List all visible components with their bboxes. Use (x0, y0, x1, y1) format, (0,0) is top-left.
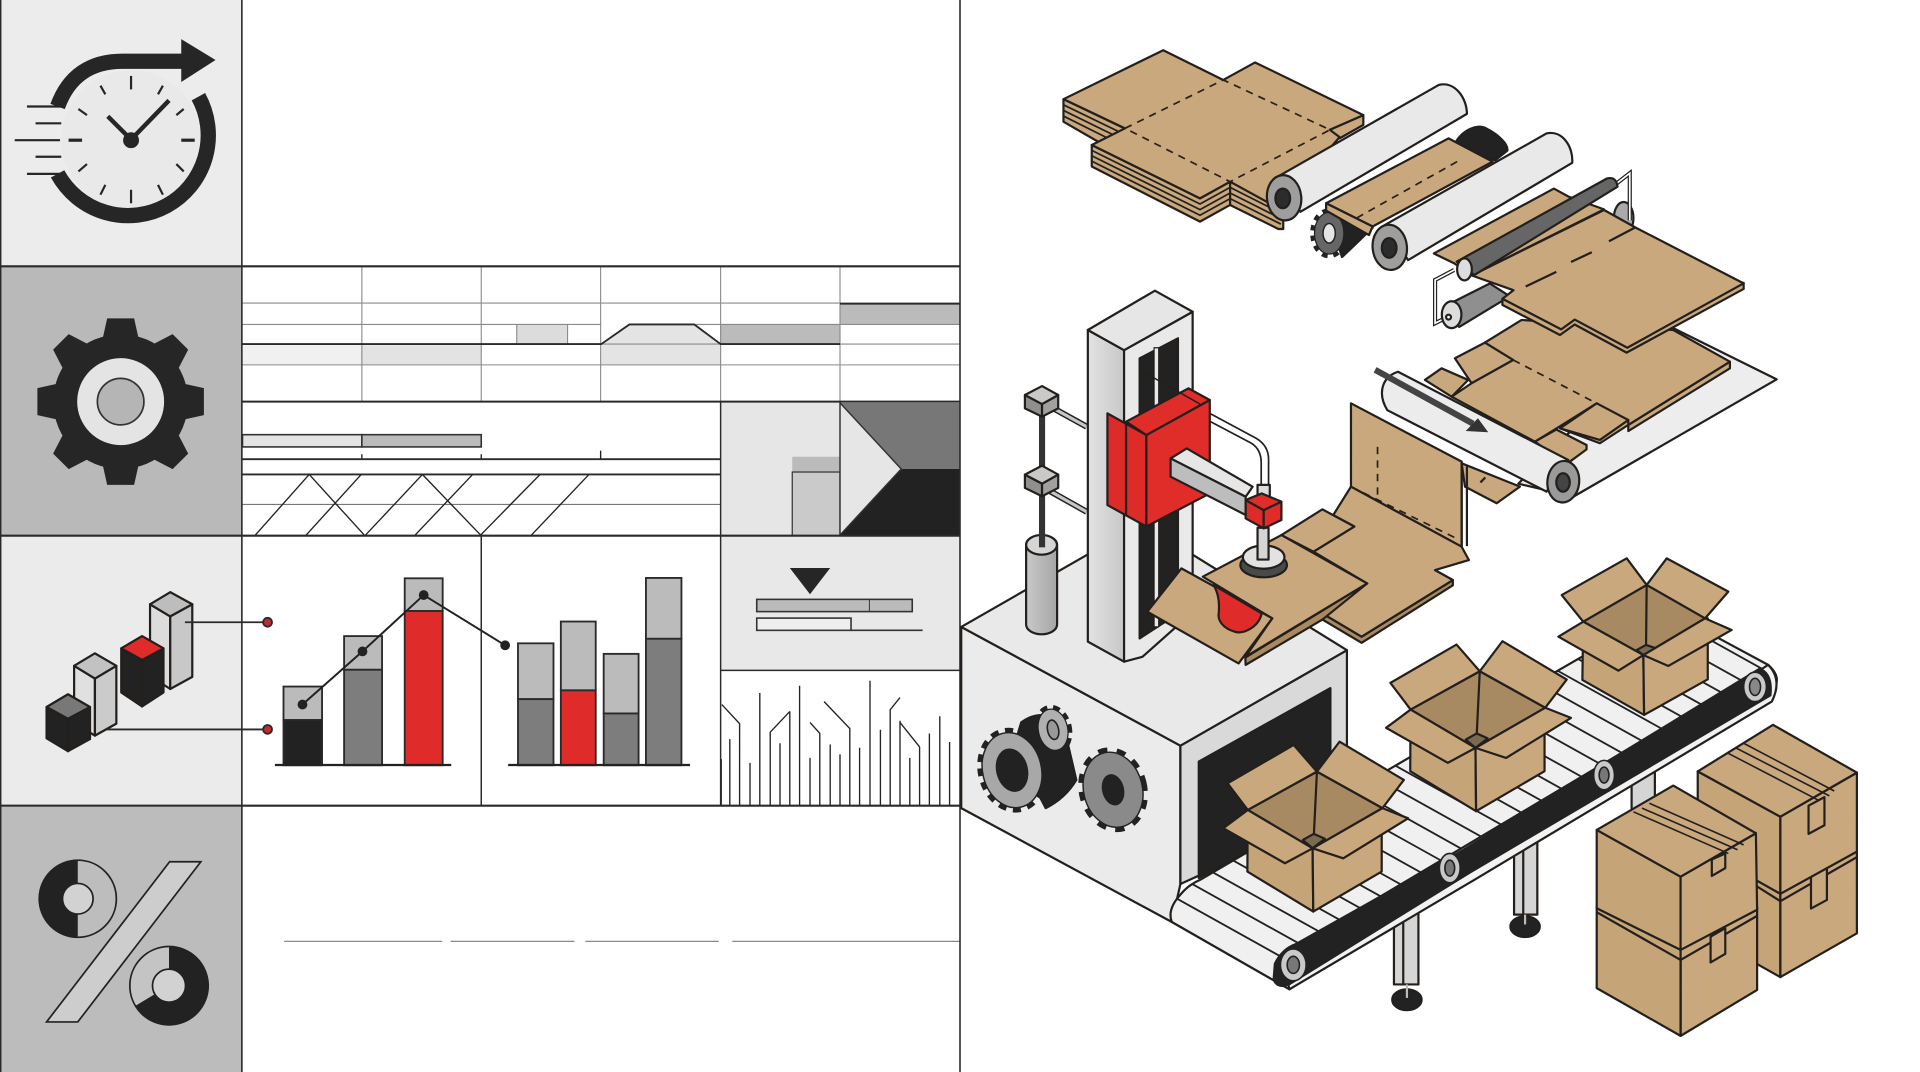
grid frame (0, 0, 960, 1072)
icon: small gear (1314, 212, 1344, 254)
kraft folding blank (1147, 403, 1469, 665)
truss diagonals (255, 474, 589, 535)
kraft strip after roller (1434, 189, 1604, 275)
red adhesive drop (1213, 585, 1262, 632)
chart: spike lines (721, 681, 950, 806)
table cell fills (242, 304, 960, 365)
trend line (298, 590, 510, 709)
icon: percent sign (39, 860, 208, 1025)
base top face (961, 555, 1347, 746)
gauge bars (757, 599, 923, 630)
pneumatic tubes (1210, 413, 1269, 485)
panel: arrow graphic (721, 402, 960, 536)
small lower tab (1535, 430, 1587, 464)
belt pulleys (1280, 672, 1766, 981)
white feed sheet (1518, 328, 1777, 497)
horizontal rods (1048, 405, 1087, 512)
front flap (1147, 568, 1272, 663)
bar chart: left (275, 578, 510, 765)
nozzle head (1246, 485, 1281, 528)
direction arrow (1375, 370, 1488, 432)
dark roller behind (1455, 127, 1507, 160)
progress bar (242, 435, 481, 447)
belt slats (1178, 641, 1762, 956)
leg one (1392, 910, 1422, 1010)
upper kraft sheet (1472, 210, 1744, 353)
front upper box (1597, 786, 1757, 950)
conveyor legs (1392, 765, 1655, 1010)
panel: gear icon (0, 267, 242, 536)
main panel (1245, 583, 1367, 665)
pneumatic cylinder (1026, 533, 1057, 634)
panel: timeline strip (242, 435, 721, 535)
leg two (1510, 841, 1540, 937)
white roller one (1265, 84, 1467, 222)
left stack layers (1063, 99, 1133, 162)
vertical rod (1039, 410, 1045, 545)
panel: speed clock icon (0, 0, 242, 266)
main sheet face (1452, 320, 1730, 442)
column slot (1140, 338, 1178, 638)
panel: percent icon (0, 807, 242, 1072)
base left face (961, 627, 1180, 922)
dashed baseline (284, 940, 960, 942)
panel: gantry table (242, 267, 960, 402)
sheet thickness (1502, 283, 1744, 353)
front stack layers (1092, 145, 1283, 229)
belt surface (1170, 606, 1777, 989)
icon: right arrow (840, 403, 901, 535)
upper flap (1455, 343, 1513, 383)
bracket frame (1435, 173, 1630, 323)
icon: front dark block (47, 694, 90, 751)
suction pad (1240, 528, 1287, 577)
blank top face (1063, 50, 1363, 208)
panel: marker and bars (721, 536, 960, 670)
left guide rods and cylinder (1025, 386, 1087, 634)
connector callouts (107, 618, 272, 734)
kraft strip between rollers (1326, 138, 1493, 235)
icon: right gear (1075, 746, 1151, 834)
open box on belt, third (1558, 558, 1732, 715)
icon: red topped block (121, 636, 163, 707)
side flap (1281, 509, 1354, 552)
icon: clock with arrow (15, 39, 216, 216)
column front face (1124, 312, 1193, 662)
open box on belt, first (1223, 742, 1408, 912)
black side band (1273, 669, 1771, 986)
column top face (1088, 291, 1193, 350)
belt outer sliver (1282, 665, 1777, 989)
rear roller disc (1614, 202, 1633, 234)
white roller three (1382, 372, 1581, 504)
guide cube lower (1025, 466, 1058, 496)
back panel (1351, 403, 1462, 547)
machine base (961, 555, 1347, 922)
leg three (1632, 765, 1655, 814)
fold lines (1351, 447, 1457, 539)
column left face (1088, 330, 1124, 662)
second tab (1425, 368, 1468, 397)
floor panel (1322, 580, 1453, 643)
rear upper box (1698, 725, 1857, 894)
front tab (1560, 420, 1628, 443)
dark grey rod (1457, 178, 1618, 280)
icon: medium grey block (74, 653, 116, 736)
front closed box stack (1597, 786, 1757, 1036)
red carriage (1107, 370, 1210, 527)
rear lower box (1698, 845, 1857, 977)
kraft flap under roller (1462, 463, 1520, 503)
machine opening (1199, 688, 1330, 878)
rear right layers (1330, 115, 1363, 138)
sheet thickness (1628, 362, 1730, 431)
gear cluster on base (974, 706, 1151, 834)
drum behind gears (1014, 715, 1076, 808)
icon: lower donut (130, 946, 208, 1025)
icon: down triangle (790, 568, 830, 594)
open box on belt, second (1386, 641, 1571, 811)
white roller two (1370, 133, 1572, 272)
guide cube upper (1025, 386, 1058, 417)
icon: gear (37, 318, 204, 485)
rear closed box stack (1698, 725, 1857, 977)
small gear drum (1314, 207, 1373, 257)
icon: large gear (974, 726, 1050, 814)
sheet top face (1472, 210, 1744, 348)
icon: upper donut (39, 860, 116, 937)
base right face (1180, 650, 1347, 884)
flat blank stack (1063, 50, 1363, 229)
icon: small gear (1034, 706, 1072, 753)
scene: packaging machine line (961, 50, 1857, 1036)
bar chart: right (508, 578, 690, 765)
icon: percent slash (47, 862, 201, 1022)
lower kraft sheet (1425, 320, 1730, 464)
icon: tall grey block (150, 592, 192, 689)
conveyor belt (1169, 638, 1778, 990)
panel: isometric blocks icon (0, 536, 272, 806)
vertical column (1088, 291, 1193, 662)
robot arm (1171, 448, 1253, 515)
front lower box (1597, 907, 1757, 1036)
lower small roller (1442, 283, 1510, 328)
